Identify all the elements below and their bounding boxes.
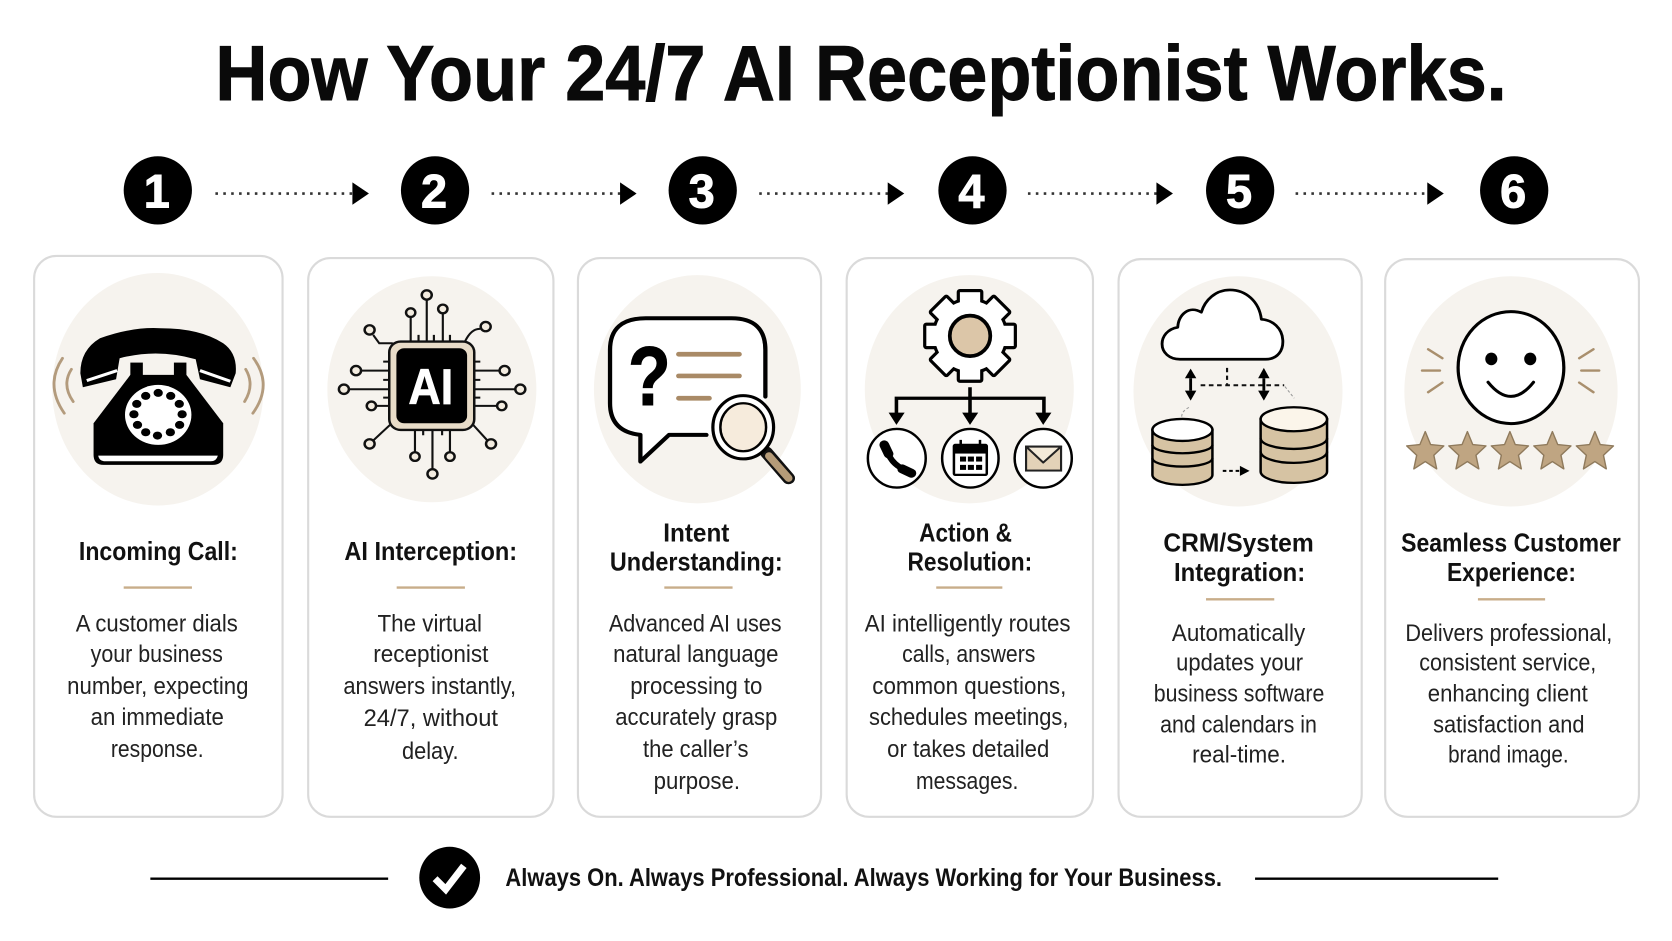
text: incoming call description: A customer dials — [76, 610, 238, 637]
text: intent understanding description: Advanced AI uses — [609, 610, 782, 637]
text: CRM integration description: real-time. — [1192, 741, 1286, 768]
text: action and resolution description: calls, answers — [902, 641, 1035, 668]
step 6 badge: 6 — [1500, 165, 1526, 217]
step 1 badge — [124, 156, 192, 224]
text: action and resolution description: or takes detailed — [887, 736, 1049, 763]
text: incoming call description: your business — [91, 641, 223, 668]
icon: check badge — [419, 847, 480, 909]
text: intent understanding description: processing to — [630, 673, 762, 700]
panel: seamless customer experience — [1385, 259, 1639, 817]
panel: incoming call — [34, 256, 283, 817]
heading: intent understanding: Intent — [663, 518, 730, 548]
step 3 badge: 3 — [689, 165, 715, 217]
text: AI interception description: The virtual — [377, 610, 482, 637]
text: intent understanding description: the caller’s — [643, 736, 749, 763]
step 4 badge — [938, 156, 1007, 224]
text: action and resolution description: messages. — [916, 768, 1018, 795]
text: customer experience description: enhancing client — [1428, 681, 1588, 708]
heading: seamless customer experience — [1401, 527, 1621, 587]
icon: cloud syncing with databases — [1152, 290, 1327, 485]
title: How Your 24/7 AI Receptionist Works. — [215, 31, 1507, 117]
heading: CRM and system integration — [1163, 527, 1314, 587]
text: action and resolution description: common questions, — [872, 673, 1066, 700]
text: CRM integration description: business software — [1154, 681, 1324, 708]
panel: action and resolution — [847, 258, 1093, 817]
step 6 badge — [1480, 156, 1548, 224]
icon: speech bubble with magnifier: ? — [628, 330, 671, 423]
step 2 badge: 2 — [421, 165, 447, 217]
panel: CRM and system integration — [1119, 259, 1362, 817]
text: AI interception description — [343, 610, 516, 765]
text: intent understanding description: purpose. — [654, 768, 740, 795]
tagline text: Always On. Always Professional. Always Working for Your Business. — [505, 864, 1222, 892]
text: incoming call description: number, expecting — [67, 673, 248, 700]
text: action and resolution description — [865, 610, 1071, 795]
heading: action and resolution: Resolution: — [907, 547, 1032, 577]
step number row — [124, 156, 1548, 224]
heading: action and resolution: Action & — [919, 518, 1012, 548]
text: intent understanding description — [609, 610, 782, 795]
arrow 3 to 4 — [759, 182, 904, 205]
text: AI interception description: answers instantly, — [343, 673, 516, 700]
text: AI interception description: delay. — [402, 738, 459, 765]
heading: incoming call: Incoming Call: — [79, 536, 238, 566]
icon: ringing telephone — [54, 328, 263, 465]
arrow 2 to 3 — [492, 182, 637, 205]
heading: action and resolution — [907, 518, 1032, 577]
text: action and resolution description: AI intelligently routes — [865, 610, 1071, 637]
text: customer experience description: consistent service, — [1419, 650, 1596, 677]
text: intent understanding description: accurately grasp — [615, 704, 777, 731]
text: customer experience description: Delivers professional, — [1405, 620, 1612, 647]
text: customer experience description: brand image. — [1448, 741, 1569, 768]
icon: smiley with five stars — [1407, 312, 1613, 469]
arrow 5 to 6 — [1296, 182, 1444, 205]
text: incoming call description: an immediate — [91, 704, 224, 731]
footer tagline — [150, 847, 1498, 909]
heading: intent understanding: Understanding: — [610, 547, 783, 577]
icon: gear routing to phone, calendar and mail — [868, 292, 1072, 488]
text: customer experience description: satisfaction and — [1433, 712, 1585, 739]
text: CRM integration description: updates your — [1176, 650, 1303, 677]
arrow 1 to 2 — [215, 182, 369, 205]
heading: seamless customer experience: Experience: — [1447, 557, 1576, 587]
step 5 badge: 5 — [1226, 165, 1252, 217]
icon: speech bubble with magnifier — [610, 318, 789, 478]
text: incoming call description: response. — [111, 736, 204, 763]
step 5 badge — [1206, 156, 1274, 224]
step 3 badge — [669, 156, 737, 224]
icon: AI chip: AI — [408, 359, 453, 415]
text: action and resolution description: schedules meetings, — [869, 704, 1068, 731]
step 4 badge: 4 — [958, 165, 984, 217]
icon: AI chip — [339, 290, 525, 479]
text: incoming call description — [67, 610, 248, 763]
step 2 badge — [401, 156, 469, 224]
heading: intent understanding — [610, 518, 783, 577]
panel: intent understanding — [578, 258, 821, 817]
panel: AI interception — [308, 258, 553, 817]
text: customer experience description — [1405, 620, 1612, 768]
heading: seamless customer experience: Seamless Customer — [1401, 527, 1621, 557]
text: intent understanding description: natural language — [613, 641, 778, 668]
text: AI interception description: 24/7, without — [364, 705, 498, 732]
heading: AI interception: AI Interception: — [344, 536, 517, 566]
arrow 4 to 5 — [1028, 182, 1173, 205]
text: CRM integration description — [1154, 620, 1324, 768]
step 1 badge: 1 — [144, 165, 170, 217]
text: CRM integration description: and calendars in — [1160, 712, 1317, 739]
heading: CRM and system integration: CRM/System — [1163, 527, 1314, 557]
heading: CRM and system integration: Integration: — [1174, 557, 1305, 587]
text: CRM integration description: Automatically — [1172, 620, 1305, 647]
text: AI interception description: receptionist — [373, 641, 489, 668]
